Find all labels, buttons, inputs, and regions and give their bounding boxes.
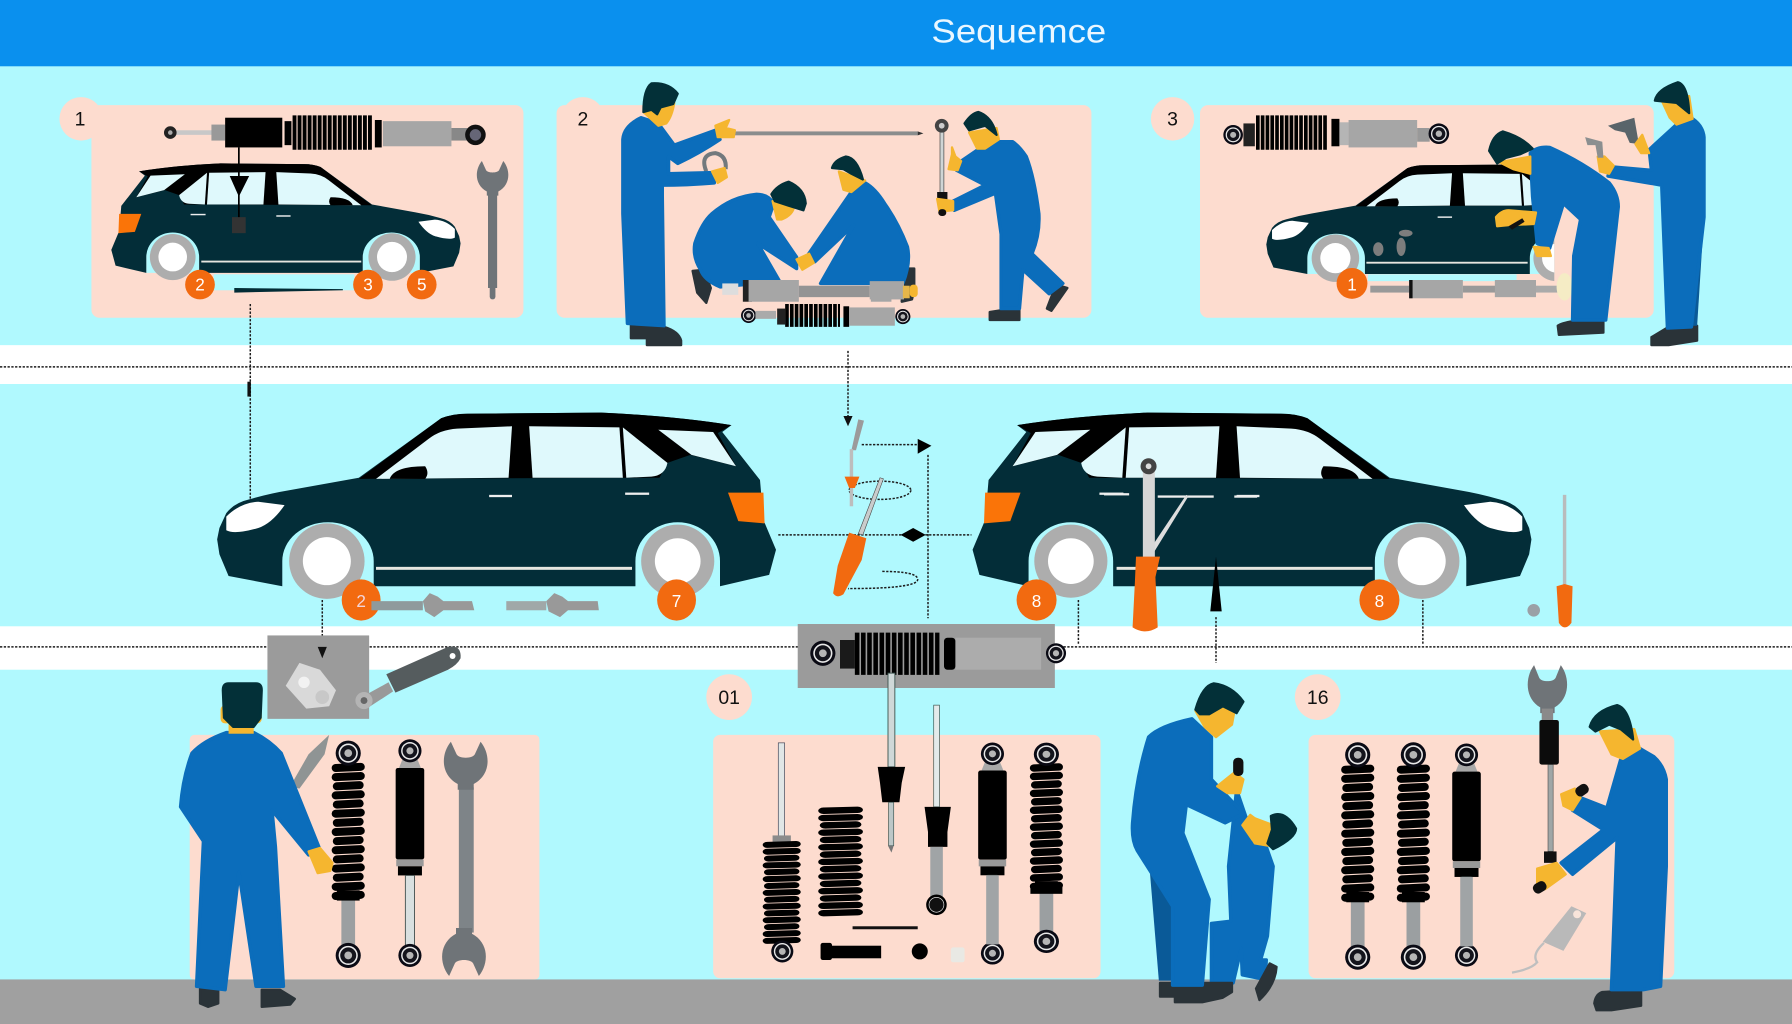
rod tool	[878, 673, 905, 853]
kneeling worker left	[693, 182, 806, 303]
badge 01: 01	[718, 687, 740, 709]
badge 2: 2	[577, 109, 588, 131]
body marks	[1373, 230, 1413, 256]
wrench tool with handle	[1528, 665, 1567, 863]
blade tool	[290, 735, 329, 789]
rod with grip	[925, 705, 951, 915]
panel: step 6	[1295, 674, 1674, 978]
loose spring	[824, 810, 858, 913]
car	[1266, 164, 1554, 282]
shock absorber	[1223, 119, 1449, 147]
badge 1	[59, 97, 103, 141]
wrench	[477, 161, 508, 299]
panel: step 4	[181, 683, 539, 1007]
tube shock	[396, 739, 424, 967]
orange badge 7	[657, 579, 696, 621]
double wrench	[442, 742, 488, 976]
walking worker	[953, 112, 1067, 320]
car right	[973, 413, 1531, 599]
panel: step 1	[59, 97, 523, 318]
kneeling worker right	[797, 157, 914, 302]
connector lines	[247, 304, 1423, 663]
orange badge 2: 2	[195, 274, 205, 294]
lying strut	[722, 280, 918, 302]
car	[111, 163, 461, 281]
orange badge 2	[185, 270, 215, 299]
coil shock second	[1401, 742, 1426, 970]
underbody strip	[214, 274, 354, 290]
bracket	[1512, 906, 1586, 973]
clip	[951, 947, 965, 962]
worker back view	[181, 683, 333, 1007]
floor	[0, 979, 1792, 1024]
coil strut	[767, 743, 796, 962]
adult worker with child	[1132, 683, 1296, 1002]
standing worker	[623, 83, 735, 345]
orange badge 8 second: 8	[1375, 591, 1384, 611]
tube shock	[1452, 744, 1481, 967]
orange badge 5: 5	[417, 274, 426, 294]
screwdriver small	[845, 419, 864, 506]
standing worker	[1585, 82, 1704, 345]
orange badge 8: 8	[1032, 591, 1041, 611]
panel: step 2	[557, 83, 1091, 345]
orange badge 8 second	[1359, 579, 1399, 621]
badge 3: 3	[1167, 109, 1178, 131]
underbody strip	[1368, 274, 1517, 281]
orange badge 5	[407, 270, 437, 299]
needle tool	[735, 131, 923, 135]
bolt bar	[821, 943, 881, 960]
tube shock	[978, 743, 1007, 965]
bent worker	[1489, 131, 1618, 335]
ring tool	[704, 153, 726, 171]
badge 1: 1	[75, 109, 85, 131]
badge 16	[1295, 674, 1341, 720]
bolt	[371, 593, 474, 617]
badge 2	[561, 97, 605, 141]
orange badge 2	[342, 579, 381, 621]
orange badge 7: 7	[672, 591, 681, 611]
white band lower	[0, 626, 1792, 670]
child	[1211, 790, 1296, 1000]
white band upper	[0, 345, 1792, 384]
hardware line	[853, 926, 918, 929]
ratchet tool	[935, 119, 961, 216]
black marker	[1210, 557, 1222, 611]
coil shock	[1030, 743, 1062, 953]
badge 16: 16	[1307, 687, 1329, 709]
bolt second	[506, 593, 599, 617]
orange badge 3	[353, 270, 383, 299]
panel: step 3	[1151, 82, 1704, 345]
panel: step 5	[706, 673, 1101, 978]
badge 3	[1151, 97, 1194, 141]
orange badge 1: 1	[1347, 274, 1357, 294]
shock absorber	[741, 306, 910, 327]
alignment arrow	[230, 147, 249, 233]
gray box with bracket	[267, 635, 369, 719]
coil shock first	[1345, 742, 1370, 970]
orange badge 2: 2	[356, 591, 366, 611]
worker right	[1531, 705, 1666, 1010]
header bar	[0, 0, 1792, 66]
nut	[912, 943, 928, 959]
strut	[1370, 273, 1573, 301]
shock absorber	[164, 118, 486, 147]
coil shock	[336, 741, 361, 968]
sill line	[234, 288, 343, 293]
orange badge 3: 3	[363, 274, 373, 294]
small screwdriver right	[1557, 495, 1573, 627]
badge 01	[706, 674, 752, 720]
orange badge 1	[1337, 268, 1367, 299]
title: Sequemce	[931, 13, 1106, 50]
ratchet handle	[355, 647, 461, 709]
shock absorber on gray box	[798, 624, 1066, 688]
door handles car right	[1104, 493, 1257, 498]
tool on car	[1133, 458, 1189, 631]
screwdriver large	[833, 478, 883, 596]
orange badge 8	[1017, 579, 1057, 621]
washer	[1527, 604, 1540, 617]
car left	[217, 413, 776, 599]
adult	[1132, 683, 1264, 1002]
